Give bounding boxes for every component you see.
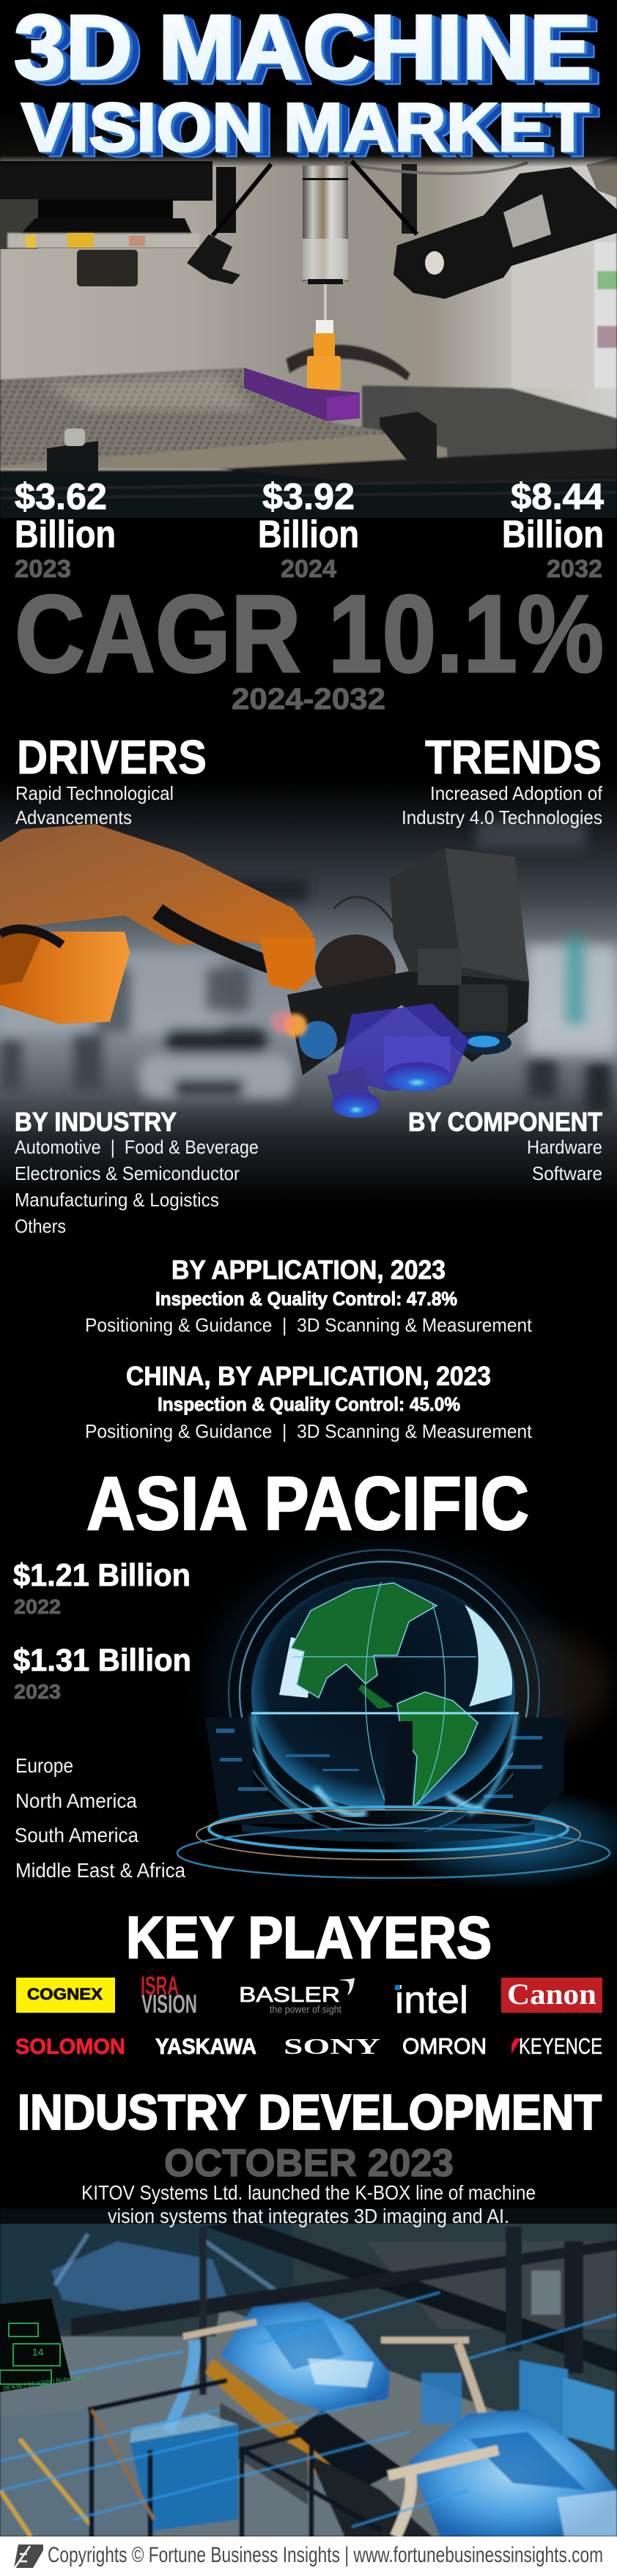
China by application: Positioning & Guidance | 3D Scanning & Measurement	[85, 1420, 533, 1442]
Asia Pacific values: $1.31 Billion	[13, 1643, 191, 1678]
right angled camera	[344, 157, 617, 299]
by component	[408, 1107, 602, 1184]
bright polar glare	[465, 1605, 512, 1707]
by application: BY APPLICATION, 2023	[171, 1255, 446, 1285]
front clamps	[47, 441, 98, 472]
robot arms	[183, 2322, 469, 2340]
floor and walkways	[0, 2336, 410, 2536]
Asia Pacific values	[13, 1558, 191, 1703]
Asia Pacific values: 2023	[14, 1680, 61, 1703]
logo: Isra Vision: ISRA	[141, 1972, 179, 2000]
by industry: BY INDUSTRY	[15, 1107, 177, 1137]
base rings	[209, 1807, 568, 1851]
blue server boxes right	[520, 2360, 568, 2446]
by component: BY COMPONENT	[408, 1107, 602, 1137]
China by application: CHINA, BY APPLICATION, 2023	[126, 1361, 491, 1391]
by industry: Electronics & Semiconductor	[15, 1162, 240, 1184]
development description: KITOV Systems Ltd. launched the K-BOX line of machine	[81, 2181, 536, 2204]
other regions: Middle East & Africa	[15, 1859, 185, 1882]
vision head body	[287, 848, 529, 1075]
development description	[81, 2181, 536, 2227]
title: 3D MACHINE	[14, 0, 591, 98]
logo: Basler: BASLER	[239, 1983, 340, 2007]
market size 2032: Billion	[502, 513, 604, 556]
China by application: Inspection & Quality Control: 45.0%	[158, 1393, 460, 1415]
other regions: Europe	[15, 1754, 73, 1777]
small angled camera left	[187, 164, 271, 284]
meridians	[251, 1712, 519, 1714]
ghost car top-left	[51, 2241, 231, 2315]
logo: Isra Vision	[141, 1972, 197, 2019]
CAGR: 2024-2032	[232, 682, 385, 716]
market size 2023: $3.62	[15, 476, 107, 517]
Asia Pacific values: $1.21 Billion	[13, 1558, 191, 1593]
beams	[205, 2219, 617, 2373]
market size 2023	[15, 476, 116, 583]
market size 2024: Billion	[258, 513, 359, 556]
orange gripper block	[0, 932, 130, 1024]
photo: robot arm with 3D vision head	[0, 781, 617, 1204]
title: VISION MARKET	[21, 89, 589, 166]
trends: Increased Adoption of	[430, 782, 603, 804]
market size 2032: $8.44	[511, 476, 604, 517]
market size 2024: $3.92	[262, 476, 355, 517]
black hose	[158, 911, 271, 965]
by industry: Others	[15, 1215, 66, 1237]
blurred factory background	[0, 820, 617, 1113]
left overhead camera with ring light	[0, 161, 213, 286]
photo: digital twin car factory	[0, 2205, 617, 2536]
logo: Basler	[239, 1978, 355, 2015]
China by application	[85, 1361, 533, 1442]
drivers: DRIVERS	[17, 730, 207, 784]
market size 2024: 2024	[281, 555, 336, 583]
logo: Cognex: COGNEX	[27, 1985, 103, 2003]
date: OCTOBER 2023	[164, 2142, 454, 2185]
footer	[0, 2536, 617, 2576]
logo: Omron: OMRON	[402, 2033, 487, 2059]
land: Asia	[291, 1583, 437, 1698]
by application	[85, 1255, 533, 1336]
other regions: South America	[15, 1824, 138, 1846]
fade behind caption	[0, 2205, 617, 2224]
market size 2032: 2032	[547, 555, 602, 583]
trends	[402, 730, 603, 828]
blue car bottom right	[409, 2410, 617, 2536]
market size 2032	[502, 476, 604, 583]
tech shell lower	[205, 1718, 564, 1824]
key players heading: KEY PLAYERS	[126, 1905, 492, 1971]
conveyor	[205, 2358, 396, 2520]
purple clamp bar	[244, 368, 360, 421]
trends: TRENDS	[425, 730, 602, 784]
by application: Positioning & Guidance | 3D Scanning & Measurement	[85, 1314, 533, 1336]
icon: Fortune Business Insights logo	[14, 2545, 43, 2568]
land: Americas	[397, 1692, 478, 1807]
logo: Solomon: SOLOMON	[15, 2035, 125, 2059]
by industry	[15, 1107, 259, 1237]
logo: Basler: the power of sight	[270, 2003, 341, 2015]
by application: Inspection & Quality Control: 47.8%	[155, 1288, 457, 1310]
market size 2024	[258, 476, 359, 583]
title	[14, 0, 591, 166]
orange arm upper	[0, 824, 314, 952]
top fade over photo	[0, 110, 617, 167]
blue light streaks	[0, 2293, 617, 2527]
Asia Pacific values: 2022	[14, 1595, 61, 1618]
logo: Cognex	[16, 1978, 115, 2013]
trends: Industry 4.0 Technologies	[402, 806, 602, 828]
market size 2023: 2023	[15, 555, 71, 583]
logo: Canon: Canon	[507, 1978, 596, 2011]
market size 2023: Billion	[15, 513, 116, 556]
Asia Pacific heading: ASIA PACIFIC	[86, 1461, 529, 1545]
by industry: Automotive | Food & Beverage	[15, 1136, 259, 1158]
other regions	[15, 1754, 185, 1882]
green status monitor: 14	[32, 2346, 44, 2358]
lenses	[270, 984, 511, 1118]
globe illustration	[177, 1545, 617, 1890]
by component: Hardware	[527, 1136, 602, 1158]
drivers: Advancements	[15, 806, 132, 828]
logo: Yaskawa: YASKAWA	[155, 2035, 256, 2059]
central spindle and orange part	[303, 166, 348, 390]
blue car centre	[220, 2302, 390, 2411]
other regions: North America	[15, 1789, 137, 1812]
development description: vision systems that integrates 3D imaging and AI.	[108, 2205, 509, 2227]
logo: Sony: SONY	[284, 2033, 380, 2059]
logo: Intel: intel	[395, 1979, 468, 2022]
green status monitor	[0, 2298, 86, 2392]
blue box low centre	[130, 2424, 238, 2531]
photo: machine vision inspection station	[0, 88, 617, 524]
railing	[88, 2380, 381, 2536]
by industry: Manufacturing & Logistics	[15, 1189, 219, 1211]
by component: Software	[532, 1162, 602, 1184]
drivers: Rapid Technological	[15, 782, 174, 804]
green status monitor: 38 KW | 59 KWh | Ruhe 3kw	[2, 2373, 86, 2392]
stats black band	[0, 518, 617, 782]
drivers	[15, 730, 207, 828]
orange joint	[259, 938, 315, 991]
logo: Isra Vision: VISION	[141, 1990, 197, 2019]
